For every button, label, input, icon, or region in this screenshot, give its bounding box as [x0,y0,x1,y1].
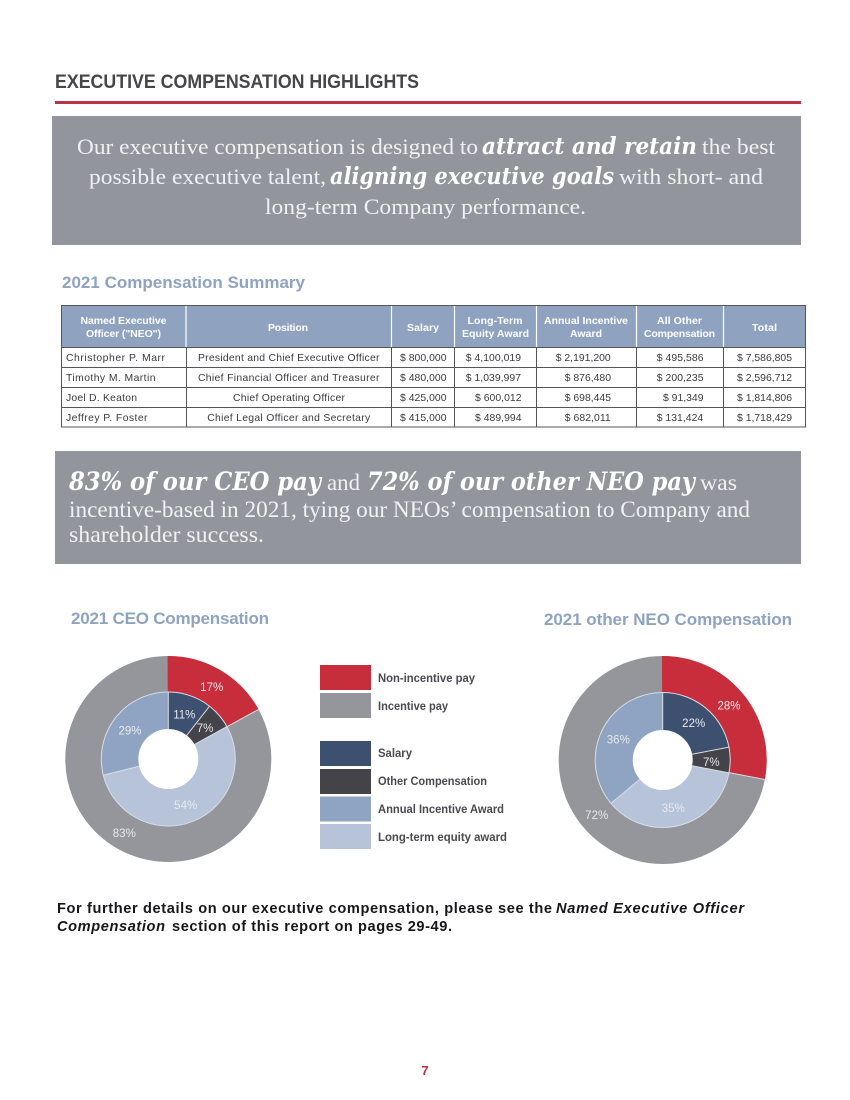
table row: Joel D. Keaton: Chief Operating Officer [233,393,346,404]
table header: Annual Incentive [544,315,628,327]
legend: Annual Incentive Award [378,804,504,816]
panel: compensation statement: possible executive talent, [89,164,326,189]
table header: Total [752,322,777,334]
donut chart: CEO compensation: 83% [113,828,136,840]
donut chart: CEO compensation: 7% [197,723,213,735]
donut chart: CEO compensation [83,674,259,844]
panel: incentive pay callout [55,451,801,564]
table row: Timothy M. Martin: $ 1,039,997 [466,373,521,384]
text block: further details note: For further details on our executive compensation, please see the [57,901,552,917]
text block: further details note [57,901,745,935]
panel: incentive pay callout: shareholder success. [69,522,264,548]
table row: Jeffrey P. Foster: $ 1,718,429 [737,413,792,424]
table header: Salary [407,322,439,334]
table row: Joel D. Keaton: $ 91,349 [663,393,704,404]
panel: incentive pay callout: 83% of our CEO pay [68,467,322,496]
table row: Joel D. Keaton [66,393,792,404]
donut chart: other NEO compensation: 72% [585,810,608,822]
table header: Named Executive [80,315,167,327]
panel: incentive pay callout: was [700,470,737,496]
table row: Timothy M. Martin [66,373,792,384]
table row: Christopher P. Marr: President and Chief Executive Officer [198,353,380,364]
donut chart: CEO compensation: 29% [118,726,142,738]
table row: Timothy M. Martin: Chief Financial Officer and Treasurer [198,373,380,384]
table row: Timothy M. Martin: Timothy M. Martin [66,373,156,384]
table: compensation summary [61,305,806,427]
legend [320,665,507,849]
page number: 7 [421,1063,429,1078]
legend: Long-term equity award [378,832,507,844]
donut chart: other NEO compensation: 35% [662,803,685,815]
table row: Christopher P. Marr: $ 2,191,200 [556,353,611,364]
panel: compensation statement: aligning executive goals [330,163,614,190]
heading: CEO compensation: 2021 CEO Compensation [71,609,269,628]
table row: Joel D. Keaton: Joel D. Keaton [66,393,137,404]
panel: compensation statement: long-term Company performance. [265,194,586,219]
table row: Jeffrey P. Foster: Jeffrey P. Foster [66,413,148,424]
table row: Joel D. Keaton: $ 600,012 [475,393,522,404]
table header: Long-Term [468,315,522,327]
donut chart: other NEO compensation [577,674,765,846]
table header [80,315,777,340]
table row: Christopher P. Marr: Christopher P. Marr [66,353,166,364]
panel: incentive pay callout: and [327,470,360,496]
table row: Christopher P. Marr: $ 7,586,805 [737,353,792,364]
table row: Timothy M. Martin: $ 876,480 [565,373,611,384]
legend: Other Compensation [378,776,487,788]
donut chart: other NEO compensation: 7% [703,757,720,769]
heading: compensation summary: 2021 Compensation Summary [62,273,306,292]
table row: Jeffrey P. Foster: $ 415,000 [400,413,447,424]
panel: compensation statement: the best [702,134,776,159]
table row: Christopher P. Marr [66,353,792,364]
table row: Timothy M. Martin: $ 200,235 [657,373,704,384]
table header: Position [268,322,308,334]
table row: Jeffrey P. Foster [66,413,792,424]
panel: compensation statement: attract and retain [482,133,697,160]
heading: other NEO compensation: 2021 other NEO Compensation [544,610,792,629]
donut chart: CEO compensation: 11% [173,710,195,722]
panel: incentive pay callout: incentive-based in 2021, tying our NEOs’ compensation to Company and [69,497,750,523]
table row: Christopher P. Marr: $ 800,000 [400,353,447,364]
table header: All Other [657,315,702,327]
table header: Award [570,328,602,340]
table row: Timothy M. Martin: $ 480,000 [400,373,447,384]
table header: Officer ("NEO") [86,328,161,340]
donut chart: CEO compensation: 17% [200,682,223,694]
table row: Joel D. Keaton: $ 698,445 [565,393,611,404]
table row: Christopher P. Marr: $ 495,586 [657,353,704,364]
table row: Jeffrey P. Foster: $ 489,994 [475,413,522,424]
donut chart: other NEO compensation: 28% [717,700,741,712]
donut chart: other NEO compensation: 22% [682,718,705,730]
table row: Jeffrey P. Foster: Chief Legal Officer and Secretary [207,413,371,424]
donut chart: other NEO compensation: 36% [607,734,630,746]
text block: further details note: Named Executive Officer [556,901,745,917]
text block: further details note: section of this report on pages 29-49. [172,919,452,935]
table row: Jeffrey P. Foster: $ 131,424 [657,413,703,424]
donut chart: CEO compensation: 54% [174,800,197,812]
table row: Christopher P. Marr: $ 4,100,019 [466,353,521,364]
table row: Jeffrey P. Foster: $ 682,011 [565,413,611,424]
text block: further details note: Compensation [57,919,165,935]
table header: Equity Award [462,328,529,340]
table row: Timothy M. Martin: $ 2,596,712 [737,373,792,384]
table row: Joel D. Keaton: $ 425,000 [400,393,447,404]
panel: compensation statement: Our executive compensation is designed to [77,134,478,159]
table row: Joel D. Keaton: $ 1,814,806 [737,393,792,404]
title: EXECUTIVE COMPENSATION HIGHLIGHTS [55,71,419,93]
panel: compensation statement [52,116,801,245]
table header: Compensation [644,328,715,340]
legend: Incentive pay [378,701,449,713]
panel: incentive pay callout: 72% of our other NEO pay [367,467,696,496]
legend: Salary [378,748,413,760]
legend: Non-incentive pay [378,673,476,685]
panel: compensation statement: with short- and [619,164,763,189]
